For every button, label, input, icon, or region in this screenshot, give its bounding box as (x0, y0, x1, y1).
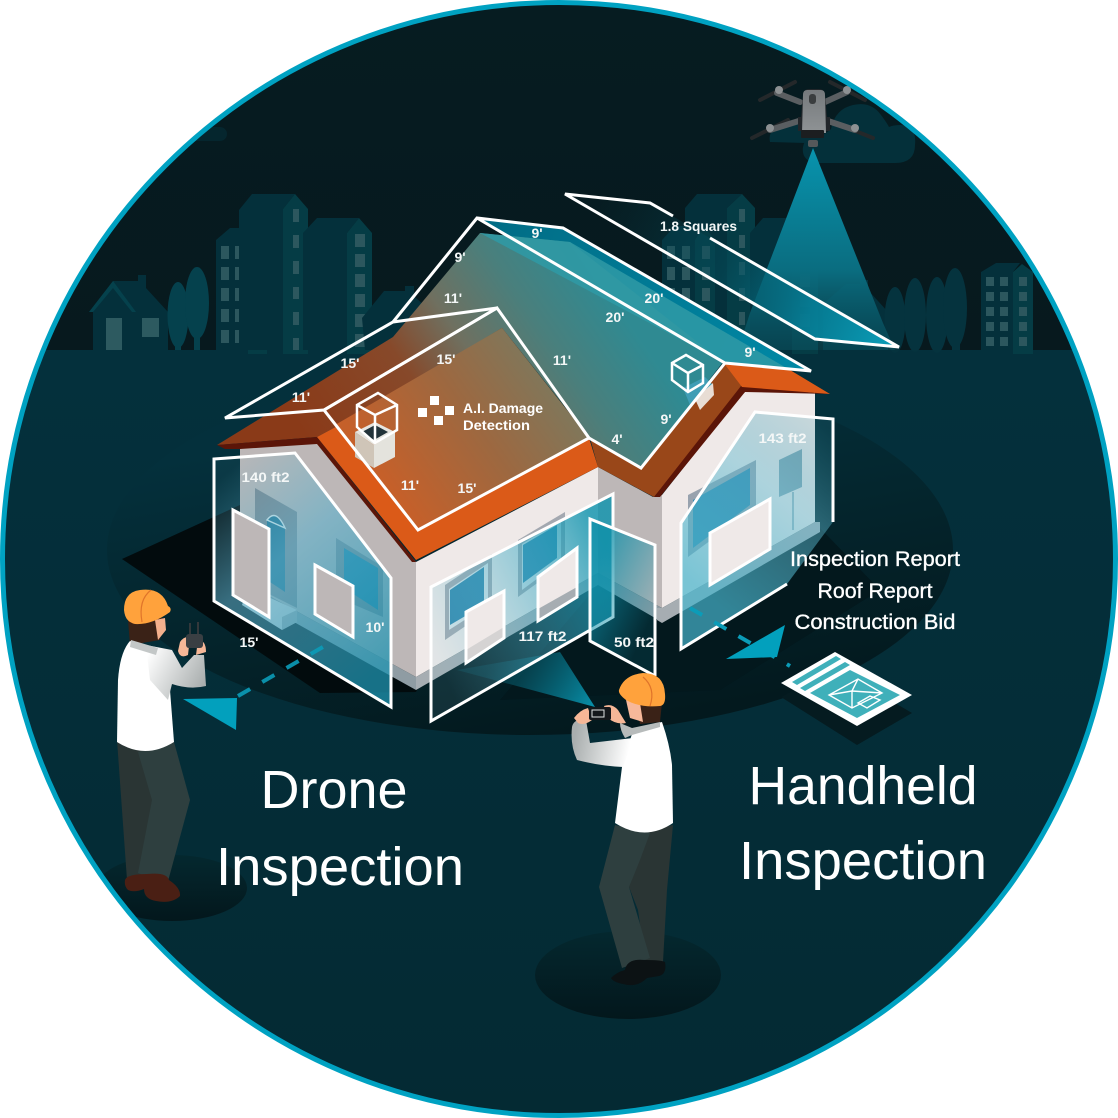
front wall base (416, 573, 598, 690)
tower 3 (303, 218, 372, 354)
sleeve (146, 645, 206, 700)
ground (0, 350, 1118, 1118)
front roof inner gradient (335, 328, 589, 530)
chimney right (683, 377, 714, 410)
electrical box (779, 449, 802, 530)
right window (688, 460, 756, 557)
house (217, 218, 830, 690)
drone (752, 82, 873, 147)
tower 7 far right (981, 263, 1033, 354)
report document icon (781, 652, 912, 745)
detection squares icon (418, 396, 454, 425)
dimension and area labels: 140 ft2 (242, 469, 290, 485)
camera beam from handheld device (457, 652, 595, 707)
right roof orange top (723, 362, 830, 394)
trees right (884, 268, 967, 353)
sleeve (572, 720, 633, 767)
report list: Construction Bid (794, 611, 956, 634)
pants back leg (117, 740, 174, 880)
dimension and area labels: 143 ft2 (758, 430, 807, 446)
dimension and area labels: 15' (341, 355, 359, 371)
dimension and area labels: 9' (454, 249, 466, 265)
upper roof band (477, 218, 811, 371)
report list (790, 548, 960, 634)
wall scan: 117 ft2 (431, 494, 613, 721)
hands (574, 705, 626, 724)
right roof dark eave (654, 386, 830, 497)
dimension and area labels: 15' (437, 351, 455, 367)
collar (130, 640, 158, 655)
dimension and area labels: 9' (744, 344, 756, 360)
worker: handheld operator (535, 673, 721, 1019)
drone motors (766, 86, 859, 132)
shirt (117, 641, 174, 751)
chimney left (355, 422, 395, 468)
pants front leg (138, 742, 190, 885)
dimension and area labels: 20' (645, 290, 663, 306)
front windows (445, 512, 565, 640)
front wall (416, 467, 598, 677)
dimension and area labels: 15' (458, 480, 476, 496)
title: drone inspection: Inspection (216, 837, 464, 897)
shoes (125, 874, 180, 902)
dark ground pool around house (118, 437, 953, 735)
label: 1.8 squares: 1.8 Squares (660, 218, 737, 234)
cloud: far left (196, 127, 227, 141)
dimension and area labels: 11' (553, 352, 571, 368)
hands (178, 637, 206, 656)
report list: Inspection Report (790, 548, 960, 571)
shadow right of house (558, 530, 879, 652)
hard hat (124, 590, 171, 624)
shoes (611, 960, 665, 985)
recessed base (598, 573, 662, 622)
right gable wall (662, 392, 815, 608)
shadow (535, 931, 721, 1019)
tower 1 (216, 228, 267, 354)
shadow (97, 855, 247, 921)
wireframe cube left (357, 393, 397, 443)
remote controller (186, 622, 203, 648)
tower 4 (685, 194, 755, 334)
trees left (168, 267, 209, 350)
dimension and area labels: 11' (401, 477, 419, 493)
dimension and area labels: 9' (660, 411, 672, 427)
title: handheld inspection (739, 756, 987, 891)
wireframe cube right (672, 355, 703, 392)
upper roof sheen (480, 233, 790, 370)
title: handheld inspection: Handheld (748, 756, 978, 816)
dimension and area labels: 10' (366, 619, 384, 635)
left roof dark eave (217, 437, 416, 562)
wall scan: 50 ft2 (590, 519, 655, 676)
dimension and area labels: 15' (240, 634, 258, 650)
dimension and area labels: 9' (531, 225, 543, 241)
tower 5 (662, 226, 715, 314)
drone rotors (752, 82, 873, 138)
buildings: right skyline (662, 194, 1033, 354)
dimension and area labels: 4' (611, 431, 623, 447)
pants front (599, 825, 650, 968)
roof detached measure: 1.8 squares (565, 194, 899, 347)
house cast shadow (122, 505, 440, 693)
drone scan beam (738, 148, 895, 350)
roof measurement outlines (225, 218, 811, 530)
left wall window (336, 538, 383, 617)
recessed wall (598, 467, 662, 608)
entrance steps (242, 598, 297, 630)
dimension and area labels: 117 ft2 (518, 628, 567, 644)
right wall base (657, 522, 820, 623)
title: drone inspection (216, 760, 464, 897)
arrow: to report (690, 608, 790, 666)
neck and head (128, 618, 163, 645)
detection label: A.I. Damage (463, 400, 543, 416)
tower 6 (750, 218, 818, 354)
night sky (0, 0, 1118, 350)
dimension and area labels: 20' (606, 309, 624, 325)
wall scan: 140 ft2 (214, 453, 391, 707)
A.I. damage detection: Detection (463, 417, 530, 433)
back roof plane with gradient (217, 233, 723, 468)
report list: Roof Report (818, 580, 933, 603)
pants back (629, 825, 673, 962)
dimension and area labels (240, 225, 807, 650)
drone body (798, 89, 830, 131)
phone (589, 707, 611, 720)
arrow: drone direction (183, 640, 335, 730)
head (636, 702, 662, 724)
dimension and area labels: 11' (444, 290, 462, 306)
drone arms (770, 92, 855, 130)
tower 2 (239, 194, 308, 354)
dimension and area labels: 50 ft2 (614, 634, 654, 650)
buildings: left skyline (89, 194, 440, 354)
house silhouette left (89, 275, 168, 350)
dimension and area labels: 11' (292, 389, 310, 405)
hard hat (619, 673, 665, 706)
house silhouette centre (362, 286, 422, 350)
worker: drone operator (97, 590, 247, 921)
shirt (615, 722, 673, 832)
title: handheld inspection: Inspection (739, 831, 987, 891)
front roof plane (317, 328, 598, 560)
left gable wall (240, 441, 416, 677)
right roof slope (590, 362, 744, 497)
front door (255, 488, 297, 608)
A.I. damage detection (418, 396, 543, 433)
collar (620, 722, 660, 738)
left wall base (270, 597, 416, 690)
cloud behind drone (770, 104, 915, 163)
house silhouette right (823, 280, 888, 350)
wall scan: 143 ft2 (681, 412, 833, 649)
title: drone inspection: Drone (260, 760, 408, 820)
